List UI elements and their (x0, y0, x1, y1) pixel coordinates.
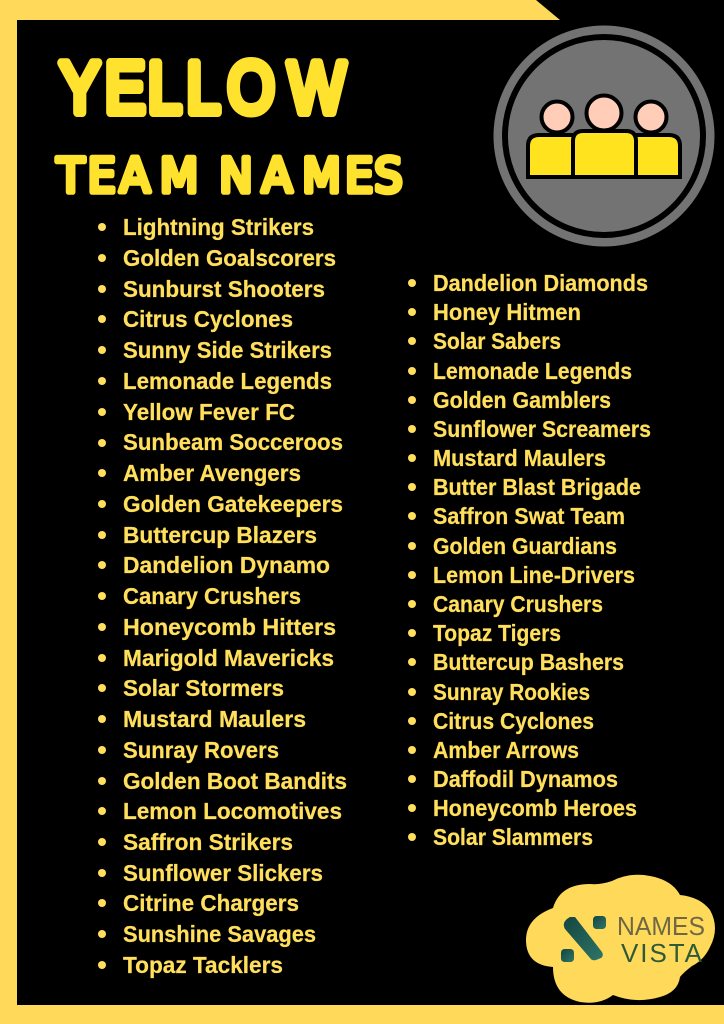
list: left column team names: Lemonade Legends (123, 368, 332, 394)
list: right column team names: Honey Hitmen (433, 299, 581, 325)
list: left column team names: Marigold Mavericks (123, 645, 334, 671)
list: left column team names: Sunburst Shooters (123, 276, 325, 302)
list: right column team names: Sunflower Screamers (433, 416, 651, 442)
subtitle: Team Names: TEAM NAMES (56, 148, 403, 203)
logo word: Vista: VISTA (621, 938, 703, 968)
list: left column team names: Dandelion Dynamo (123, 552, 330, 578)
list: right column team names: Dandelion Diamonds (433, 270, 648, 296)
list: left column team names: Buttercup Blazers (123, 522, 317, 548)
list: left column team names: Amber Avengers (123, 460, 301, 486)
list: left column team names (123, 214, 347, 978)
list: right column team names: Solar Slammers (433, 824, 593, 850)
list: left column team names: Sunray Rovers (123, 737, 279, 763)
list: left column team names: Citrine Chargers (123, 890, 299, 916)
logo mark (561, 916, 606, 962)
list: right column team names: Sunray Rookies (433, 679, 590, 705)
list: left column team names: Mustard Maulers (123, 706, 306, 732)
list: left column bullets (98, 223, 106, 969)
logo: Names Vista cloud (526, 875, 715, 1003)
list: left column team names: Golden Gatekeepers (123, 491, 343, 517)
icon: team badge (494, 26, 714, 246)
list: left column team names: Citrus Cyclones (123, 306, 293, 332)
list: right column team names: Golden Gamblers (433, 387, 611, 413)
list: right column team names: Golden Guardians (433, 533, 617, 559)
list: right column team names: Lemon Line-Drivers (433, 562, 635, 588)
list: right column team names: Honeycomb Heroes (433, 795, 637, 821)
list: right column team names: Lemonade Legends (433, 358, 632, 384)
list: right column team names: Canary Crushers (433, 591, 603, 617)
list: right column team names: Citrus Cyclones (433, 708, 594, 734)
logo word: Names: NAMES (617, 911, 705, 941)
list: right column team names (433, 270, 651, 850)
list: right column team names: Buttercup Bashers (433, 649, 624, 675)
list: left column team names: Lemon Locomotives (123, 798, 342, 824)
cloud shape (526, 875, 715, 1003)
list: left column team names: Sunbeam Socceroos (123, 429, 343, 455)
list: right column team names: Saffron Swat Team (433, 503, 625, 529)
list: right column bullets (408, 279, 416, 841)
list: right column team names: Amber Arrows (433, 737, 579, 763)
list: left column team names: Sunshine Savages (123, 921, 316, 947)
list: left column team names: Sunflower Slickers (123, 860, 323, 886)
list: left column team names: Saffron Strikers (123, 829, 293, 855)
list: right column team names: Butter Blast Brigade (433, 474, 641, 500)
list: left column team names: Lightning Strikers (123, 214, 314, 240)
list: left column team names: Canary Crushers (123, 583, 301, 609)
list: left column team names: Yellow Fever FC (123, 399, 295, 425)
icon: team of three people (528, 96, 680, 177)
list: left column team names: Sunny Side Strikers (123, 337, 332, 363)
list: right column team names: Topaz Tigers (433, 620, 561, 646)
title: Yellow: YELLOW (60, 49, 345, 129)
list: right column team names: Daffodil Dynamos (433, 766, 618, 792)
list: left column team names: Golden Boot Bandits (123, 768, 347, 794)
list: right column team names: Mustard Maulers (433, 445, 606, 471)
list: left column team names: Topaz Tacklers (123, 952, 283, 978)
list: left column team names: Honeycomb Hitters (123, 614, 336, 640)
list: left column team names: Golden Goalscorers (123, 245, 336, 271)
list: right column team names: Solar Sabers (433, 328, 561, 354)
list: left column team names: Solar Stormers (123, 675, 284, 701)
